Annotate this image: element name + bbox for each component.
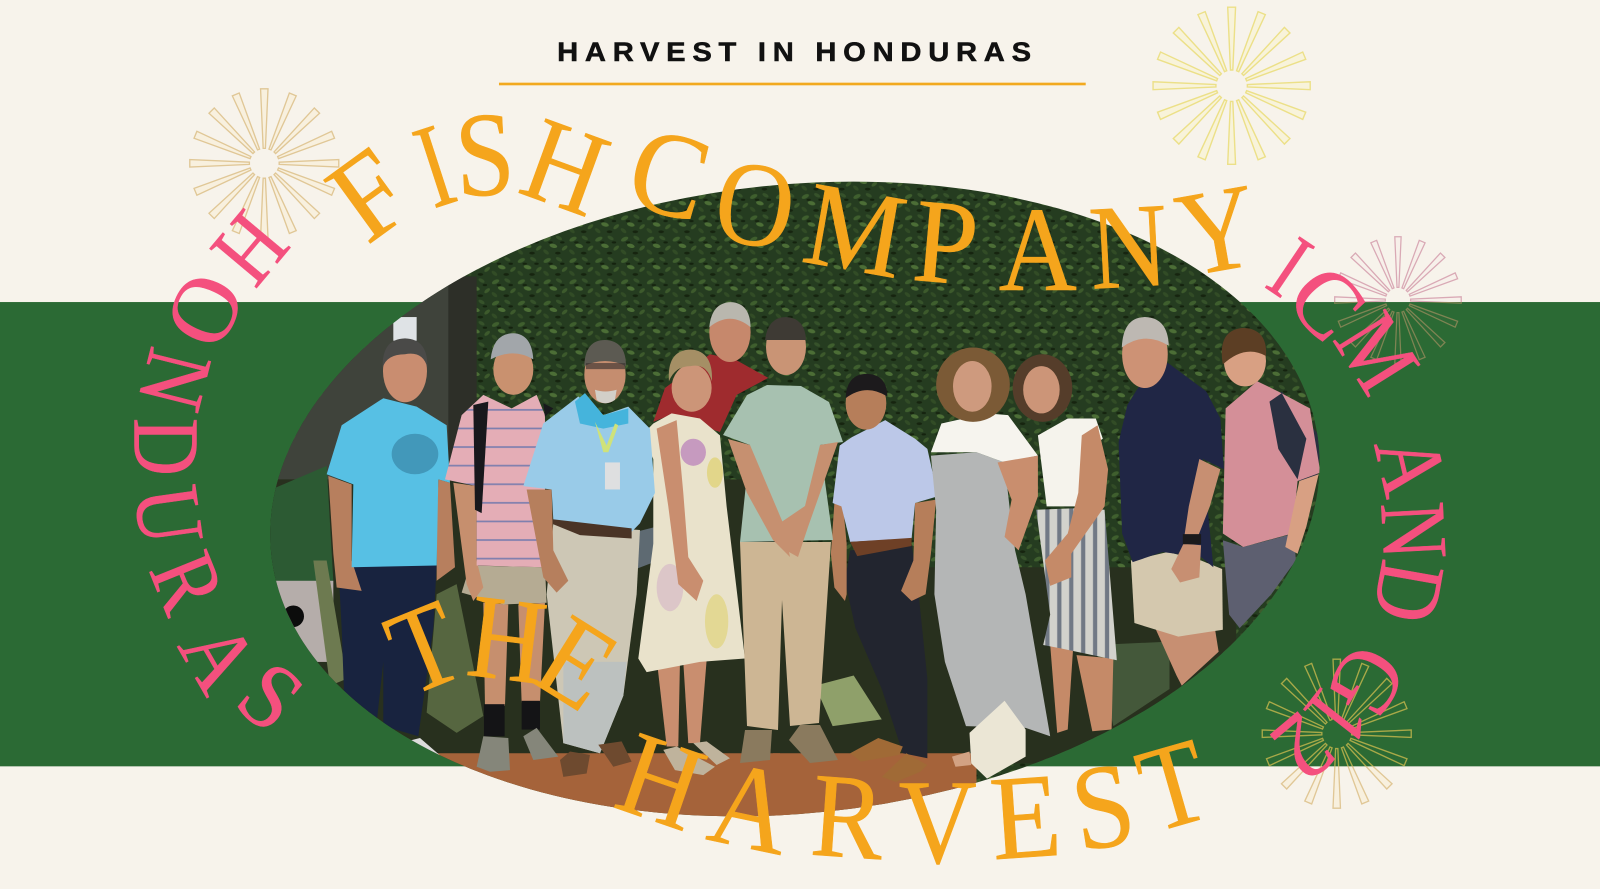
person: large man in navy polo [1119, 317, 1224, 686]
curved title: HARVEST: E [986, 748, 1065, 886]
garden, floor and people of the left half [263, 276, 790, 865]
icon: sunburst top left [190, 89, 339, 238]
group photo in tilted oval [270, 182, 1320, 816]
wall and post [278, 276, 477, 480]
curved title: THE: H [461, 568, 553, 710]
plants and planter [263, 466, 790, 760]
heading: HARVEST IN HONDURAS [557, 37, 1038, 67]
curved title: FISH COMPANY: A [999, 183, 1077, 316]
curved title: FISH COMPANY: O [706, 132, 804, 276]
circular title: HONDURAS: O [144, 258, 267, 363]
icon: sunburst right on band edge [1335, 237, 1461, 363]
person: young man in pink shirt with backpack [1222, 328, 1322, 628]
curved title: FISH COMPANY: Y [1167, 157, 1267, 302]
curved title: HARVEST: R [807, 748, 889, 886]
person: teen in pink stripes with cap [445, 333, 558, 772]
person: woman in grey overalls [931, 347, 1050, 779]
person: man in red behind [653, 302, 768, 432]
circular title: ICM AND G12: C [1267, 245, 1386, 361]
curved title: FISH COMPANY: M [795, 157, 915, 305]
person: man in periwinkle shirt [831, 374, 938, 782]
terracotta floor [436, 753, 790, 816]
curved title: FISH COMPANY: H [507, 91, 624, 243]
circular title: HONDURAS: S [219, 640, 324, 752]
circular title: ICM AND G12: M [1314, 295, 1441, 410]
curved title: FISH COMPANY: P [908, 174, 983, 312]
hedge background [255, 173, 1337, 827]
person: woman in floral dress [630, 350, 745, 775]
curved title: HARVEST: V [899, 755, 977, 889]
circular title: ICM AND G12: A [1354, 425, 1469, 505]
curved title: HARVEST: S [1063, 736, 1143, 877]
circular title: ICM AND G12: G [1306, 628, 1429, 736]
curved title: HARVEST: H [603, 705, 720, 857]
curved title: FISH COMPANY: I [400, 98, 469, 234]
curved title: FISH COMPANY [304, 86, 1267, 316]
circular title: ICM AND G12: D [1352, 553, 1465, 630]
curved title: THE: E [514, 589, 640, 737]
curved title: HARVEST: T [1124, 712, 1223, 858]
circular title: HONDURAS: D [114, 418, 218, 476]
circular title: HONDURAS: N [118, 339, 233, 420]
circular title: HONDURAS: A [158, 605, 279, 709]
curved title: THE [369, 568, 640, 737]
circular title: HONDURAS [114, 193, 324, 752]
circular title: ICM AND G12 [1252, 217, 1469, 802]
circular title: ICM AND G12: 1 [1284, 669, 1391, 765]
person: man in blue tee [327, 338, 455, 760]
curved title: FISH COMPANY: C [615, 100, 724, 249]
plants and floor [773, 567, 1236, 817]
circular title: ICM AND G12: 2 [1253, 693, 1355, 802]
curved title: FISH COMPANY: S [452, 86, 518, 223]
curved title: HARVEST: A [699, 734, 803, 881]
circular title: ICM AND G12: N [1361, 499, 1468, 562]
curved title: HARVEST [603, 705, 1223, 889]
curved title: FISH COMPANY: N [1086, 178, 1171, 315]
curved title: FISH COMPANY: F [304, 122, 434, 267]
heading underline [499, 83, 1086, 85]
garden, floor and people of the right half [773, 317, 1322, 817]
green band [0, 302, 1600, 766]
circular title: HONDURAS: U [114, 479, 225, 551]
circular title: HONDURAS: R [129, 538, 246, 626]
icon: sunburst lower right on band edge [1262, 659, 1411, 808]
curved title: THE: T [369, 573, 479, 722]
circular title: ICM AND G12: I [1252, 217, 1329, 316]
person: young man in sage tee [723, 317, 843, 763]
person: man in light blue polo [523, 340, 655, 777]
icon: sunburst top right [1153, 7, 1310, 164]
person: woman in striped skirt [1013, 354, 1117, 733]
circular title: HONDURAS: H [192, 193, 309, 304]
